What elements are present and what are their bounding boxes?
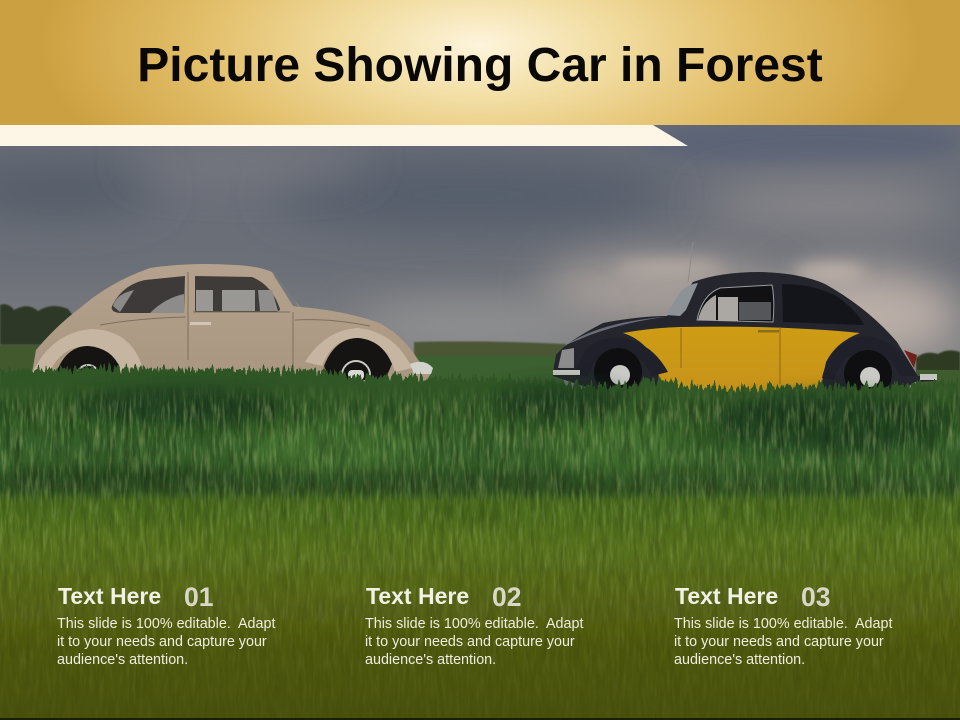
header band [0,0,960,125]
yellow car bumpers and lights [553,370,580,375]
yellow car windshield [666,283,698,316]
text block 03 [674,582,892,668]
yellow car antenna [688,242,693,282]
number 01: 01 [184,582,213,612]
beige car fenders [32,329,142,373]
sky with clouds [0,120,960,410]
heading 02: Text Here [366,583,469,609]
body 01: This slide is 100% editable. Adapt it to your needs and capture your audience's attention. [57,616,275,668]
number 03: 03 [801,582,830,612]
grass field [0,367,960,720]
yellow car fenders [576,338,668,376]
background treeline and fields [0,304,960,400]
grass solid fill below the edge [0,396,960,720]
grass dark shading patches [75,385,285,425]
beige car [32,264,433,390]
yellow car side panel [623,327,860,392]
black and yellow car [553,242,937,398]
text block 02 [365,582,584,668]
grass blade texture [0,384,960,720]
beige car front bumper [410,362,433,374]
yellow car rear window [782,284,864,325]
yellow car black body [553,272,936,392]
yellow car hood highlight [566,317,665,345]
body 03: This slide is 100% editable. Adapt it to your needs and capture your audience's attention. [674,616,892,668]
body 02: This slide is 100% editable. Adapt it to your needs and capture your audience's attention. [365,616,583,668]
beige car door lines [100,272,370,365]
beige car front window [195,276,280,312]
text block 01 [57,582,276,668]
yellow car front window [697,285,774,322]
beige car wheels [55,346,120,380]
bottom dark edge [0,718,960,720]
beige car body [32,264,432,390]
heading 03: Text Here [675,583,778,609]
heading 01: Text Here [58,583,161,609]
grass fuzzy top edge [0,367,960,720]
title: Picture Showing Car in Forest [137,39,823,92]
yellow car wheels [594,348,642,396]
beige car rear window [112,276,185,313]
cream ribbon [0,125,688,146]
beige car windshield [272,273,299,307]
number 02: 02 [492,582,521,612]
